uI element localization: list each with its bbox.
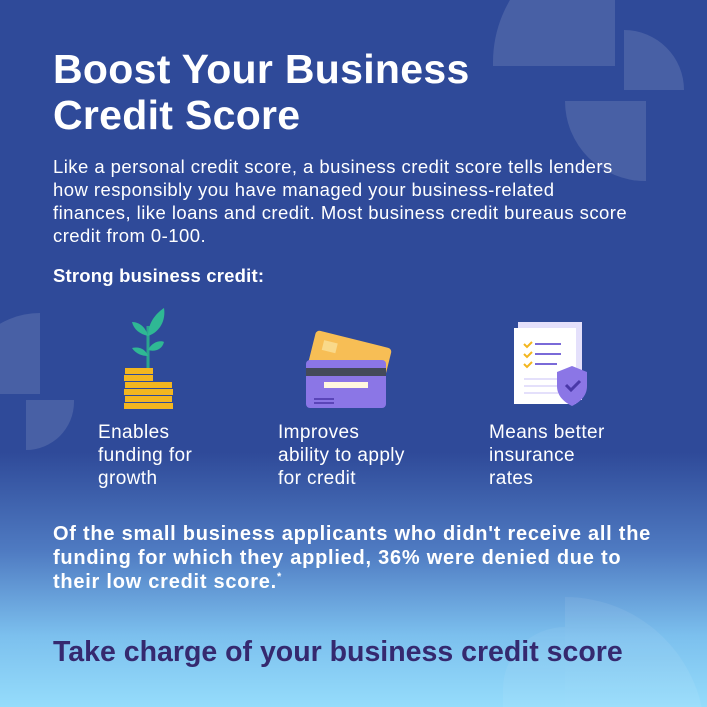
icon: document shield [514, 322, 587, 406]
icon: plant coins [124, 308, 173, 409]
benefit 2 text: ability to apply [278, 445, 405, 466]
decorative shapes top right [493, 0, 615, 66]
benefit 3 text: Means better [489, 422, 605, 443]
call to action: Take charge of your business credit score [53, 636, 623, 668]
subheading: Strong business credit: [53, 265, 264, 286]
icon: credit cards [306, 330, 392, 408]
benefit 3 text: insurance [489, 445, 575, 466]
benefit 1 text: growth [98, 468, 157, 489]
intro text: how responsibly you have managed your business-related [53, 179, 554, 200]
intro text: Like a personal credit score, a business credit score tells lenders [53, 156, 613, 177]
benefit 1 text [98, 422, 192, 489]
intro text: credit from 0-100. [53, 225, 206, 246]
benefit 3 text [489, 422, 605, 489]
statistic text: Of the small business applicants who didn't receive all the [53, 523, 651, 545]
statistic text: funding for which they applied, 36% were denied due to [53, 547, 621, 569]
benefit 2 text: for credit [278, 468, 356, 489]
statistic text [53, 523, 651, 593]
benefit 1 text: funding for [98, 445, 192, 466]
title: Boost Your Business [53, 46, 470, 92]
benefit 1 text: Enables [98, 422, 169, 443]
statistic text: their low credit score.* [53, 571, 282, 593]
benefit 2 text [278, 422, 405, 489]
intro text: finances, like loans and credit. Most business credit bureaus score [53, 202, 627, 223]
intro text [53, 156, 627, 246]
title: Credit Score [53, 92, 300, 138]
title [53, 46, 470, 138]
benefit 2 text: Improves [278, 422, 359, 443]
decorative shapes left [0, 313, 40, 394]
benefit 3 text: rates [489, 468, 533, 489]
decorative shapes bottom right [565, 597, 705, 707]
